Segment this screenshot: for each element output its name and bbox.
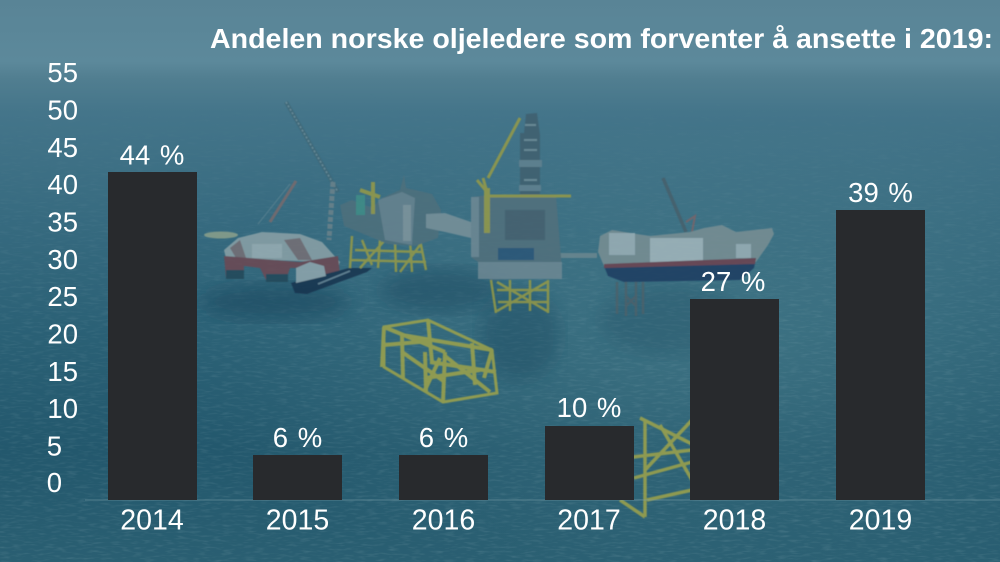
bar: 2014: 2014 xyxy=(120,504,184,536)
platform: left topside modules xyxy=(340,175,441,246)
platform: left semi-submersible vessel xyxy=(204,181,340,282)
y axis labels: 40 xyxy=(47,169,78,200)
bar: 2015: 2015 xyxy=(266,504,329,536)
bar: 2019: 39 % xyxy=(848,177,913,208)
bar: 2018 xyxy=(690,266,779,536)
y axis labels: 35 xyxy=(47,206,78,238)
bar: 2014: 44 % xyxy=(120,140,184,170)
y axis labels: 10 xyxy=(47,393,78,424)
y axis labels: 15 xyxy=(47,356,78,387)
platform: long lattice crane xyxy=(286,102,338,240)
platform: centre jacket xyxy=(491,280,548,313)
y axis labels xyxy=(47,57,78,498)
bar: 2019 xyxy=(836,177,925,536)
bar: 2018: 27 % xyxy=(701,266,765,297)
platform: left jacket legs xyxy=(350,236,426,272)
platform: yellow jacket behind bars xyxy=(620,418,692,517)
bar chart xyxy=(108,140,925,536)
y axis labels: 5 xyxy=(47,430,62,462)
y axis labels: 50 xyxy=(47,94,78,126)
bar: 2018: 2018 xyxy=(703,504,766,536)
platform: right jack-up rig xyxy=(598,178,774,316)
title: Andelen norske oljeledere som forventer å ansette i 2019: xyxy=(210,23,993,54)
bar: 2017: 2017 xyxy=(557,504,621,536)
bar: 2017 xyxy=(545,392,634,536)
illustration: offshore platforms xyxy=(204,102,774,517)
y axis labels: 45 xyxy=(47,132,78,163)
platform: centre drilling rig xyxy=(471,113,571,280)
bar: 2015: 6 % xyxy=(273,422,322,453)
y axis labels: 20 xyxy=(47,318,78,350)
bar: 2016 xyxy=(399,422,488,536)
bar: 2016: 2016 xyxy=(412,504,475,536)
platform: yellow jacket floating left xyxy=(382,320,497,402)
bar: 2017: 10 % xyxy=(557,392,621,423)
platform: supply vessel xyxy=(291,262,372,294)
y axis labels: 30 xyxy=(47,244,78,275)
bar: 2016: 6 % xyxy=(419,422,468,453)
y axis labels: 25 xyxy=(47,281,78,312)
bar: 2019: 2019 xyxy=(849,504,912,536)
y axis labels: 55 xyxy=(47,57,78,88)
bar: 2014 xyxy=(108,140,197,536)
bar: 2015 xyxy=(253,422,342,536)
y axis labels: 0 xyxy=(47,467,62,498)
axis baseline xyxy=(85,499,1000,501)
platform: connecting bridges xyxy=(426,213,597,258)
